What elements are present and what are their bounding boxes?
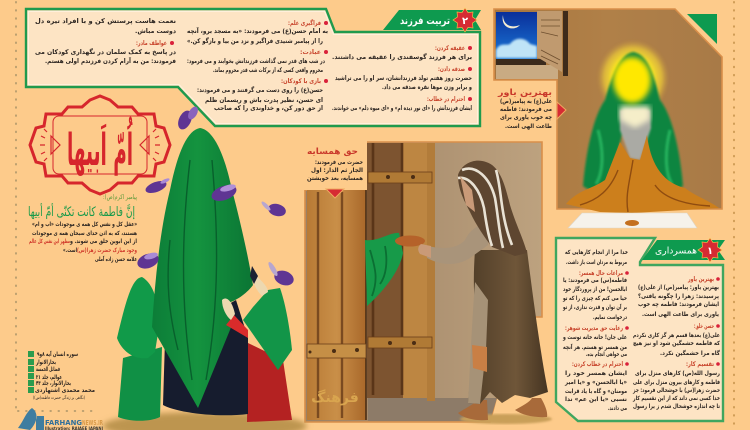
logo bbox=[18, 408, 103, 430]
prayer mat bbox=[568, 213, 697, 228]
patch bbox=[472, 345, 487, 372]
quote block: پیامبر اکرم(ص): bbox=[103, 193, 137, 201]
text column: left: «یا ابالحسن» و «یا امیر bbox=[564, 380, 627, 386]
text column: left: درخواست نمایم. bbox=[593, 315, 627, 321]
quote block: «عقل کل و نفس کل همه ی موجودات «اب و ام» bbox=[32, 221, 137, 228]
text block: patience and mother's care: در پاسخ به کمک سلمان در نگهداری کودکان می bbox=[35, 48, 177, 56]
text column: left: حیا می کنم که چیزی را که تو bbox=[562, 295, 627, 302]
text column: right bbox=[632, 275, 721, 410]
title ornament bbox=[30, 96, 170, 194]
text block: learning, worship, play bbox=[187, 19, 328, 112]
callout: neighbor's right: حضرت می فرمودند: bbox=[315, 160, 363, 166]
callout: best helper: طاعت الهی است. bbox=[505, 124, 552, 130]
text block: aqiqah, charity, addressing: عقیقه کردن: bbox=[435, 44, 465, 52]
text block: learning, worship, play: فراگیری علم: bbox=[288, 19, 321, 27]
callout: neighbor's right: حق همسایه bbox=[307, 147, 358, 157]
ribbon heading: housekeeping bbox=[642, 238, 725, 262]
text column: right: فاطمه و کارهای بیرون منزل برای علی bbox=[633, 379, 720, 386]
ribbon heading: housekeeping: همسرداری bbox=[655, 246, 697, 256]
references list: بحارالانوار، جلد ۴۳ bbox=[36, 380, 71, 387]
quote block: مظهر این نفس کل عالم bbox=[29, 238, 70, 245]
references list: محمد محمدی اشتهاردی bbox=[35, 388, 95, 394]
arm bbox=[427, 224, 488, 264]
text column: right: تقسیم کار: bbox=[686, 360, 714, 368]
text column: right: علی(ع) بعدها قسم هر گز کاری نکردم bbox=[633, 331, 720, 339]
text block: patience and mother's care: فرمودند: من به آرام کردن فرزندم اولی هستم. bbox=[45, 56, 176, 65]
mother mantle bbox=[152, 128, 253, 408]
text column: left bbox=[562, 249, 629, 412]
panel: housekeeping / spouse bbox=[556, 238, 723, 421]
quote block: إنَّ فاطمة كانت تكنّى أمّ أبيها bbox=[28, 203, 135, 220]
text block: learning, worship, play: به امام حسن(ع) می فرمودند: «به مسجد برو، آنچه bbox=[187, 26, 328, 35]
ground shadow bbox=[103, 412, 307, 430]
door: left leaf bbox=[307, 190, 366, 420]
text column: right: رسول الله(ص) کارهای منزل برای bbox=[635, 370, 720, 377]
text block: aqiqah, charity, addressing: حضرت روز هفتم تولد فرزندانشان، سر او را می تراشید bbox=[335, 74, 472, 82]
illustration: seated figure with window bbox=[494, 9, 722, 228]
text block: learning, worship, play: را از پیامبر شنیدی فراگیر و نزد من بیا و بازگو کن.» bbox=[187, 37, 323, 45]
text column: left: می خواهی انجام بده. bbox=[586, 352, 627, 358]
text block: patience and mother's care bbox=[35, 17, 177, 65]
head cloth bbox=[458, 161, 527, 256]
references list: (نگاهی بر زندگی حضرت فاطمه(س)) bbox=[33, 394, 85, 401]
icon: red arrow bbox=[557, 102, 566, 119]
title ornament: اُمّ اَبیها bbox=[67, 116, 133, 176]
text block: learning, worship, play: از حق دور کن، و خداوندی را که صاحب bbox=[214, 104, 323, 112]
icon: left sunburst bbox=[40, 129, 60, 161]
red cuff and hands bbox=[226, 315, 248, 338]
text block: aqiqah, charity, addressing: و برابر وزن موها نقره صدقه می داد. bbox=[382, 83, 472, 91]
text column: left: احترام در خطاب کردن: bbox=[572, 360, 623, 368]
text column: right: تا چه اندازه خوشحال شدم ز یرا رسول bbox=[633, 404, 720, 410]
text column: right: یاوری برای طاعت الهی است. bbox=[642, 312, 719, 318]
seated figure bbox=[566, 40, 719, 213]
text column: left: مراعات حال همسر: bbox=[579, 269, 623, 277]
text column: right: که فاطمه خشمگین شود او نیز هیچ bbox=[633, 339, 721, 347]
text block: aqiqah, charity, addressing bbox=[332, 44, 472, 112]
text column: left: مومنان» و گاه با یاد قرابت bbox=[565, 387, 627, 395]
left child bbox=[117, 277, 162, 421]
icon: right sunburst bbox=[140, 129, 160, 161]
logo: FARHANG bbox=[45, 419, 82, 427]
callout: best helper: می فرمودند: فاطمه bbox=[500, 107, 552, 113]
quote block bbox=[28, 193, 137, 263]
door: right leaf bbox=[367, 143, 435, 401]
icon: red arrow bbox=[326, 189, 344, 198]
feet bbox=[458, 398, 547, 420]
text block: aqiqah, charity, addressing: صدقه دادن: bbox=[438, 65, 465, 73]
right child bbox=[243, 288, 292, 422]
ribbon heading: housekeeping: ۱ bbox=[707, 246, 713, 257]
references list: سوره انسان آیه ۸و۹ bbox=[37, 350, 78, 358]
text column: left: ایشان همسر خود را bbox=[565, 371, 627, 377]
ribbon heading: child upbringing bbox=[383, 8, 481, 32]
text column: right: پرسیدند: زهرا را چگونه یافتی؟ bbox=[638, 292, 719, 300]
quote block: از این ابوین خلق می شوند. و bbox=[69, 239, 137, 245]
text column: left: علی جان! خانه خانه توست و bbox=[562, 335, 627, 341]
text block: patience and mother's care: دوست مباش. bbox=[135, 27, 177, 35]
text column: left: ابالحسن! من از پروردگار خود bbox=[563, 285, 627, 293]
quote block: وجود مبارک حضرت زهرا(س) bbox=[77, 247, 137, 254]
text block: aqiqah, charity, addressing: احترام در خطاب: bbox=[427, 95, 465, 103]
callout: neighbor's right: الجار ثم الدار: اول bbox=[311, 168, 363, 174]
text column: right: حضرت زهرا(س) با خوشحالی فرمود: جز bbox=[632, 388, 720, 394]
text column: left: مربوط به مردان است باز داشت. bbox=[566, 260, 627, 266]
icon: corner triangle bbox=[687, 14, 717, 44]
quote block: علامه حسن زاده آملی bbox=[95, 255, 137, 263]
text block: learning, worship, play: ای حسن، نظیر پدرت باش و ریسمان ظلم bbox=[205, 96, 323, 104]
references list bbox=[28, 350, 95, 401]
text block: aqiqah, charity, addressing: برای هر فرزند گوسفندی را عقیقه می داشتند. bbox=[332, 53, 472, 61]
text column: right: ایشان فرمودند: فاطمه چه خوب bbox=[638, 302, 719, 308]
text block: learning, worship, play: محروم واقعی کسی که از برکات شب قدر محروم بماند. bbox=[213, 66, 323, 74]
green sleeve bbox=[365, 233, 403, 306]
text column: right: حسن خلق: bbox=[694, 322, 714, 330]
callout: neighbor's right bbox=[304, 140, 367, 198]
text block: patience and mother's care: عواطف مادر: bbox=[136, 39, 167, 47]
logo: NEWS.IR bbox=[82, 419, 103, 427]
references list: عوالم، جلد ۲۱ bbox=[36, 375, 62, 381]
text block: aqiqah, charity, addressing: ایشان فرزندانش را «ای نور دیده ام» و «ای میوه دلم» می خواندند. bbox=[332, 104, 472, 112]
ribbon heading: child upbringing: ۲ bbox=[462, 16, 468, 27]
text block: learning, worship, play: بازی با کودکان: bbox=[281, 77, 321, 85]
quote block: است.» bbox=[63, 248, 77, 254]
illustration: neighbor at the door bbox=[305, 142, 542, 422]
ribbon heading: child upbringing: تربیت فرزند bbox=[400, 16, 450, 27]
text block: patience and mother's care: نعمت هاست پرستش کن و با افراد تیره دل bbox=[35, 17, 176, 25]
window with night sky bbox=[496, 11, 568, 79]
quote block: هستند، که به اذن خدای سبحان همه ی موجودات bbox=[32, 230, 137, 237]
text column: right: خدا کسی نمی داند که از این تقسیم کار bbox=[632, 395, 720, 402]
watermark: فرهنگ bbox=[311, 389, 359, 406]
text column: right: بهترین یاور: پیامبر(ص) از علی(ع) bbox=[638, 285, 719, 291]
illustration: mother and two children bbox=[103, 128, 307, 430]
references list: فضائل الخمسة bbox=[36, 367, 60, 373]
text column: left: می دادند. bbox=[608, 406, 627, 412]
text block: learning, worship, play: حسن(ع) را روی دست می گرفتند و می فرمودند: bbox=[197, 86, 323, 94]
shadow bbox=[460, 414, 552, 424]
text column: left: رعایت حق مدیریت شوهر: bbox=[565, 324, 623, 332]
figure: old man bbox=[418, 161, 552, 424]
text column: right: گاه مرا خشمگین نکرد. bbox=[660, 349, 721, 357]
butterflies bbox=[135, 105, 296, 288]
text column: left: خدا مرا از انجام کارهایی که bbox=[565, 249, 628, 256]
text column: left: بر آن توان و قدرت نداری، از تو bbox=[562, 303, 627, 311]
mother skirt bbox=[163, 300, 248, 415]
text column: right: بهترین یاور bbox=[687, 275, 714, 283]
text column: left: من همسر تو هستم. هر آنچه bbox=[563, 343, 627, 351]
text column: left: نسبی «یا ابن عم» ندا bbox=[565, 397, 627, 403]
callout: best helper: علی(ع) به پیامبر(ص) bbox=[500, 99, 552, 105]
text block: learning, worship, play: در شب های قدر نمی گذاشت فرزندانش بخوابند و می فرمود: bbox=[187, 57, 326, 65]
robe bbox=[468, 250, 548, 404]
callout: best helper bbox=[497, 88, 566, 130]
panel: child upbringing bbox=[26, 9, 480, 126]
bread bbox=[395, 236, 425, 246]
callout: neighbor's right: همسایه، بعد خویشتن bbox=[307, 176, 363, 182]
text column: left: فاطمه(س) می فرمودند: یا bbox=[563, 278, 627, 284]
callout: best helper: بهترین یاور bbox=[497, 88, 552, 98]
references list: بحارالانوار bbox=[35, 360, 56, 366]
text block: learning, worship, play: عبادت: bbox=[300, 48, 321, 56]
callout: best helper: چه خوب یاوری برای bbox=[500, 115, 552, 121]
